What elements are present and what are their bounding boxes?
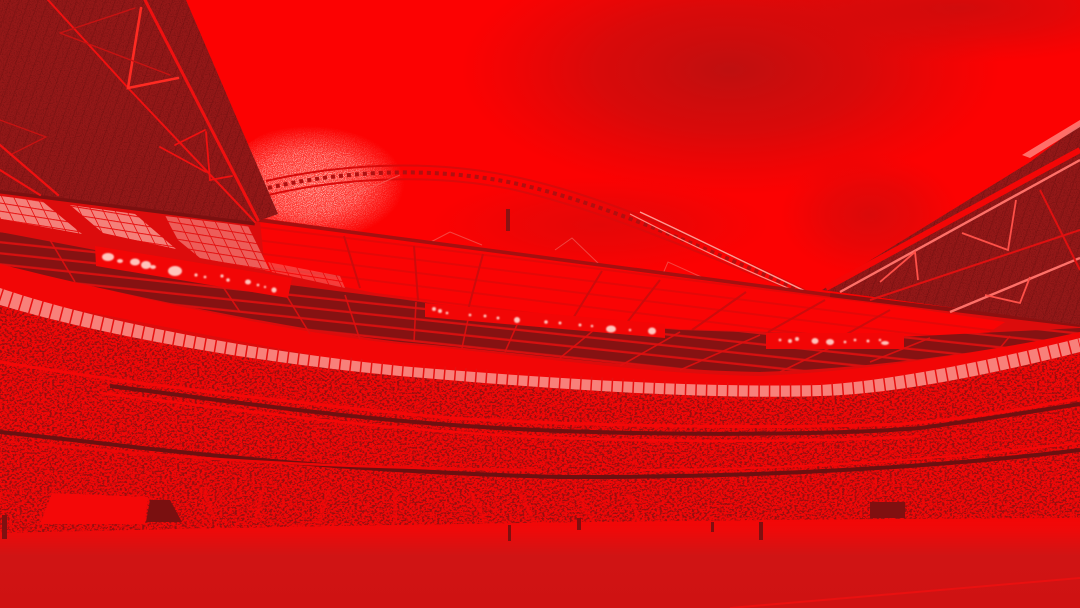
roof underside base	[0, 190, 1080, 400]
translucent roof sheet	[250, 219, 1080, 336]
stadium arch	[266, 166, 805, 291]
players	[2, 515, 763, 541]
sky	[0, 0, 1080, 310]
bright roof ring	[0, 288, 1080, 397]
pitch	[0, 515, 1080, 608]
tunnel	[146, 500, 182, 522]
red band above ring	[0, 262, 1080, 392]
glass roof panels	[0, 190, 345, 288]
top-right roof	[820, 120, 1080, 330]
hanging camera	[506, 209, 510, 231]
right scoreboard	[766, 333, 904, 349]
bright cloud patch	[248, 128, 402, 231]
stands with crowd	[0, 295, 1080, 535]
left scoreboard	[95, 246, 292, 298]
advertising board	[40, 493, 148, 524]
seating aisles	[202, 488, 640, 526]
centre scoreboard	[425, 303, 665, 338]
dark roof truss zone	[0, 232, 1080, 372]
top-left roof	[0, 0, 285, 225]
right tunnel	[870, 502, 905, 518]
